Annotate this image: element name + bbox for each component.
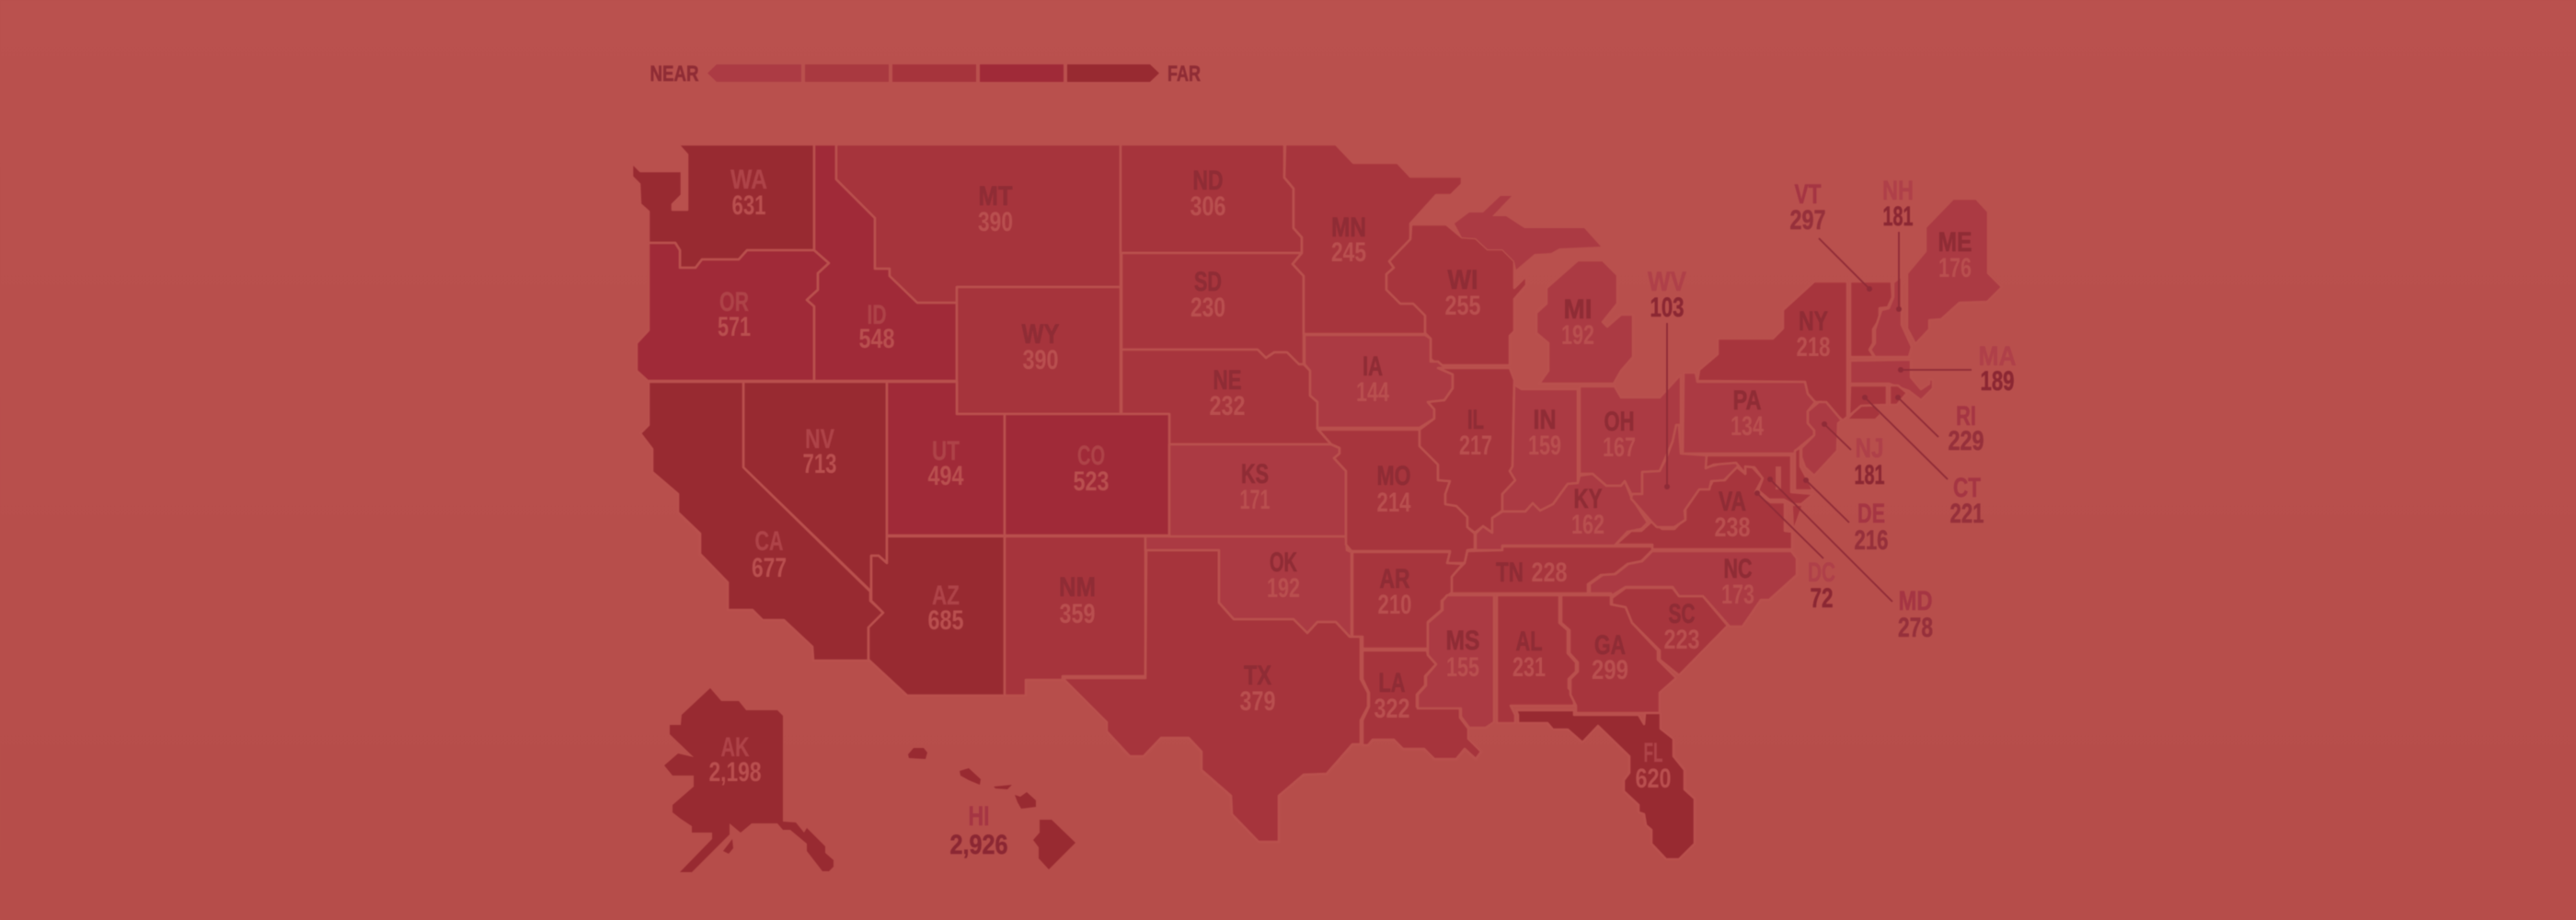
- state: Massachusetts with outside label: [1850, 341, 2017, 400]
- state: Minnesota: [1284, 144, 1462, 334]
- state: Wyoming: WY: [1021, 319, 1060, 350]
- state: Nevada: [743, 382, 887, 592]
- state: Oregon: OR: [719, 287, 749, 317]
- state: Utah: [887, 382, 1005, 535]
- state: Minnesota: MN: [1331, 213, 1366, 243]
- state: New Jersey with outside label: 181: [1855, 460, 1884, 490]
- state: Oklahoma: 192: [1267, 573, 1300, 604]
- state: Pennsylvania: 134: [1731, 411, 1764, 442]
- state: Washington: WA: [730, 165, 767, 195]
- state: Wisconsin: [1386, 224, 1526, 365]
- state: New Jersey with outside label: [1801, 402, 1884, 490]
- state: Mississippi: MS: [1446, 626, 1479, 656]
- state: Alabama: 231: [1512, 652, 1546, 683]
- state: California: 677: [752, 553, 787, 583]
- state: Mississippi: [1418, 595, 1494, 728]
- state: Pennsylvania: [1683, 373, 1815, 454]
- state: Iowa: [1305, 335, 1453, 428]
- state: Florida: 620: [1636, 764, 1671, 794]
- state: California: [640, 382, 883, 661]
- state: Alabama: AL: [1516, 627, 1542, 657]
- state: Louisiana: [1363, 650, 1481, 759]
- state: North Dakota: ND: [1192, 166, 1224, 196]
- state: Georgia: 299: [1592, 655, 1628, 685]
- state: Hawaii: 2,926: [949, 830, 1008, 860]
- state: Missouri: 214: [1376, 488, 1411, 518]
- state: Maryland with outside label: 278: [1898, 613, 1933, 643]
- state: Washington: 631: [732, 190, 765, 221]
- state: Mississippi: 155: [1446, 652, 1479, 683]
- state: Maine: [1907, 199, 2002, 344]
- state: Alabama: [1497, 595, 1576, 723]
- state: South Carolina: 223: [1663, 625, 1700, 655]
- state: Alaska: AK: [721, 732, 750, 763]
- state: West Virginia with outside label: 103: [1650, 293, 1684, 323]
- state: Idaho: [807, 144, 957, 381]
- state: Missouri: [1318, 430, 1475, 563]
- state: Colorado: 523: [1073, 466, 1110, 497]
- state: North Dakota: [1121, 144, 1302, 253]
- state: Louisiana: 322: [1374, 694, 1409, 724]
- state: Pennsylvania: PA: [1733, 385, 1761, 416]
- state: Alaska: [664, 688, 834, 872]
- state: Montana: [836, 144, 1121, 303]
- state: Louisiana: LA: [1378, 668, 1406, 698]
- state: Maryland with outside label: MD: [1899, 586, 1932, 616]
- state: Georgia: [1561, 595, 1676, 713]
- state: Kentucky: KY: [1573, 484, 1603, 514]
- state: North Carolina: 173: [1721, 580, 1754, 610]
- state: Montana: 390: [978, 207, 1013, 237]
- state: New Jersey with outside label: NJ: [1855, 433, 1884, 464]
- state: Iowa: 144: [1356, 377, 1389, 408]
- state: Vermont with outside label: [1790, 179, 1892, 357]
- state: Connecticut with outside label: 221: [1950, 499, 1984, 529]
- state: Oklahoma: OK: [1270, 547, 1297, 578]
- state: Indiana: 159: [1528, 431, 1561, 461]
- state: South Dakota: 230: [1190, 293, 1225, 323]
- state: Maine: 176: [1938, 253, 1972, 283]
- state: Texas: 379: [1240, 686, 1275, 717]
- state: Nebraska: NE: [1213, 365, 1242, 396]
- state: Texas: [1063, 550, 1368, 842]
- state: Indiana: IN: [1533, 405, 1557, 435]
- state: Arkansas: 210: [1378, 590, 1411, 620]
- state: Michigan: [1455, 196, 1633, 384]
- state: Arizona: AZ: [932, 581, 960, 611]
- state: New Hampshire with outside label: [1870, 176, 1914, 357]
- state: Montana: MT: [979, 181, 1012, 212]
- state: Illinois: [1420, 368, 1515, 533]
- state: Wisconsin: 255: [1444, 291, 1481, 321]
- state: Washington: [632, 144, 814, 268]
- district: DC outside label: 72: [1811, 583, 1833, 614]
- district: DC outside label: DC: [1808, 558, 1835, 588]
- state: Kentucky: [1476, 474, 1648, 550]
- state: Colorado: [1005, 414, 1169, 535]
- state: North Carolina: [1590, 551, 1797, 627]
- state: Oregon: [637, 243, 829, 381]
- state: Maine: ME: [1938, 227, 1972, 258]
- state: California: CA: [754, 526, 784, 557]
- state: Colorado: CO: [1077, 441, 1105, 471]
- state: Virginia: [1616, 466, 1801, 549]
- state: Arkansas: [1352, 552, 1463, 649]
- state: Arizona: 685: [927, 605, 964, 636]
- state: Arkansas: AR: [1380, 564, 1410, 594]
- state: Kansas: [1169, 444, 1346, 536]
- state: West Virginia with outside label: [1631, 267, 1745, 527]
- leader lines for small states: [1664, 232, 1972, 602]
- state: New York: 218: [1796, 332, 1831, 362]
- state: Rhode Island with outside label: [1890, 385, 1984, 456]
- state: Delaware with outside label: DE: [1857, 499, 1885, 529]
- state: Connecticut with outside label: [1849, 385, 1984, 529]
- state: New Mexico: [1005, 536, 1145, 696]
- state: New York: NY: [1799, 306, 1828, 337]
- state: Missouri: MO: [1376, 461, 1411, 491]
- state: New Hampshire with outside label: NH: [1882, 176, 1914, 206]
- state: South Carolina: SC: [1669, 599, 1695, 629]
- state: Nevada: 713: [802, 449, 837, 479]
- state: Idaho: 548: [859, 324, 894, 354]
- state: Tennessee: [1451, 546, 1652, 593]
- state: Hawaii: HI: [968, 801, 990, 832]
- legend: near to far scale: FAR: [1167, 62, 1201, 86]
- state: Iowa: IA: [1363, 351, 1383, 382]
- state: Wyoming: 390: [1023, 345, 1058, 375]
- state: Connecticut with outside label: CT: [1953, 473, 1981, 503]
- state: Nebraska: 232: [1209, 391, 1246, 421]
- state: New Mexico: 359: [1060, 599, 1095, 629]
- state: South Dakota: [1121, 253, 1304, 364]
- district: DC outside label: [1808, 558, 1835, 614]
- state: North Carolina: NC: [1724, 554, 1752, 584]
- state: Vermont with outside label: VT: [1794, 179, 1822, 210]
- state: Utah: UT: [932, 436, 960, 466]
- state: South Carolina: [1612, 588, 1728, 675]
- state: Kentucky: 162: [1571, 510, 1604, 540]
- state: West Virginia with outside label: WV: [1648, 267, 1686, 297]
- state: Arizona: [868, 536, 1005, 696]
- state: Massachusetts with outside label: MA: [1978, 341, 2017, 372]
- state: Wyoming: [957, 287, 1121, 414]
- state: Nevada: NV: [805, 424, 834, 454]
- state: Florida: [1516, 710, 1695, 859]
- state: Tennessee: TN: [1496, 558, 1524, 588]
- state: Wisconsin: WI: [1448, 265, 1478, 295]
- state: Virginia: 238: [1715, 512, 1750, 543]
- state: Ohio: [1580, 374, 1681, 494]
- state: Tennessee: 228: [1531, 558, 1568, 588]
- legend: near to far scale: NEAR: [650, 62, 699, 86]
- state: Nebraska: [1121, 350, 1331, 444]
- state: Texas: TX: [1244, 661, 1271, 691]
- state: New Hampshire with outside label: 181: [1882, 201, 1914, 232]
- state: Maryland with outside label: [1706, 455, 1933, 643]
- state: Delaware with outside label: [1795, 447, 1888, 556]
- state: Minnesota: 245: [1331, 237, 1366, 268]
- state: Idaho: ID: [867, 300, 887, 330]
- state: Ohio: 167: [1603, 432, 1636, 463]
- map of US states: [632, 144, 2017, 872]
- state: New Mexico: NM: [1059, 572, 1096, 603]
- state: Rhode Island with outside label: 229: [1949, 426, 1984, 456]
- state: Kansas: KS: [1241, 459, 1269, 489]
- state: Illinois: IL: [1467, 405, 1484, 435]
- state: Hawaii: [908, 748, 1075, 869]
- state: Delaware with outside label: 216: [1855, 525, 1888, 556]
- state: Georgia: GA: [1594, 630, 1626, 661]
- state: Indiana: [1502, 385, 1578, 512]
- state: Oklahoma: [1145, 536, 1351, 637]
- state: South Dakota: SD: [1194, 267, 1222, 297]
- legend: near to far scale: [650, 62, 1201, 86]
- state: Michigan: 192: [1561, 320, 1594, 351]
- state: Florida: FL: [1643, 738, 1663, 768]
- state: Massachusetts with outside label: 189: [1980, 366, 2015, 397]
- state: Illinois: 217: [1459, 431, 1492, 461]
- state: Michigan: MI: [1564, 294, 1592, 325]
- state: Kansas: 171: [1240, 485, 1270, 515]
- state: New York: [1697, 282, 1880, 420]
- state: Utah: 494: [927, 461, 964, 491]
- state: Ohio: OH: [1604, 407, 1634, 437]
- state: Alaska: 2,198: [708, 757, 762, 788]
- state: Oregon: 571: [718, 312, 751, 342]
- state: Rhode Island with outside label: RI: [1956, 401, 1976, 431]
- state: North Dakota: 306: [1190, 191, 1225, 222]
- state: Virginia: VA: [1719, 487, 1746, 517]
- state: Vermont with outside label: 297: [1790, 205, 1825, 236]
